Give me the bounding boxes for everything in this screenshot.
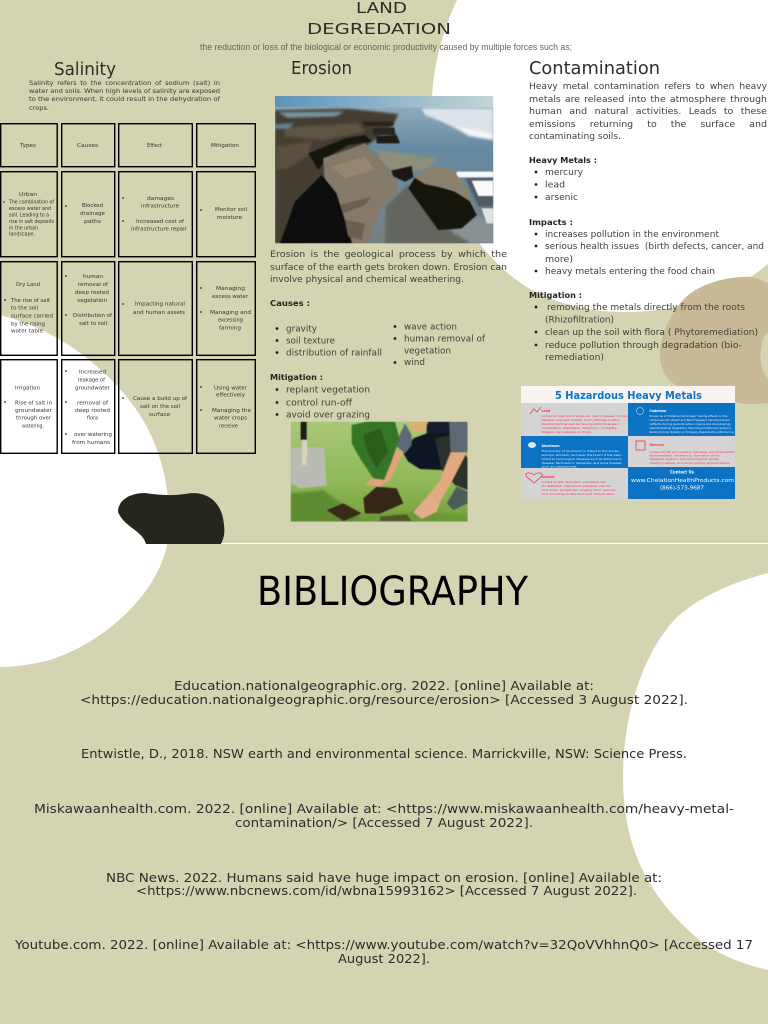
list: causes column 2	[394, 322, 486, 368]
text block: contamination definition: contaminating soils.	[529, 132, 621, 142]
table header row: Causes	[77, 143, 98, 149]
panel: bibliography	[14, 569, 753, 966]
card: lead: constipation, depression, distraction, irritability,	[542, 426, 618, 430]
table header row: Types	[19, 143, 36, 149]
table row: urban: Monitor soil	[215, 207, 247, 213]
card: aluminum: Aluminum	[542, 444, 560, 448]
table row: urban: Increased cost of	[136, 219, 184, 225]
shape: black blob	[118, 493, 224, 544]
reference 3: Miskawaanhealth.com. 2022. [online] Available at: <https://www.miskawaanhealth.com/heavy-metal-	[34, 801, 734, 816]
table row: irrigation: from humans	[72, 440, 110, 446]
list: contamination mitigation	[535, 303, 758, 363]
table row: irrigation: Rise of salt in	[15, 400, 52, 406]
table row: urban: Blocked	[82, 203, 103, 209]
table row: dry land: excessing	[218, 318, 243, 324]
text block: salinity intro	[29, 79, 221, 112]
list: causes column 1: gravity	[286, 324, 317, 334]
list: erosion mitigation: replant vegetation	[286, 386, 370, 396]
card: aluminum: kidneys, stomach, and even the brain! It has been	[542, 453, 622, 457]
table row: dry land: water table	[11, 329, 43, 335]
list: causes column 2: wave action	[404, 322, 457, 332]
text block: contamination definition: human and natural activities. Leads to these	[529, 107, 767, 117]
list: causes column 2: human removal of	[404, 334, 486, 344]
card: cadmium: Cadmium	[650, 409, 667, 413]
card: cadmium	[636, 408, 734, 434]
reference 1: <https://education.nationalgeographic.org/resource/erosion> [Accessed 3 August 2022].	[80, 692, 688, 707]
card: contact: www.ChelationHealthProducts.com	[631, 478, 734, 484]
card: arsenic: and vomiting to diarrhea and dehydration.	[542, 492, 616, 496]
photo: eroded coastline	[275, 96, 493, 243]
table row: dry land: Managing	[216, 286, 245, 292]
table row: irrigation: flora	[87, 416, 98, 422]
table row: dry land: Impacting natural	[135, 302, 185, 308]
subheading: causes: Causes :	[270, 298, 310, 308]
table row: irrigation: surface	[149, 412, 170, 418]
table row: urban: soil. Leading to a	[9, 212, 49, 218]
card: lead: fatigue, nervousness, & more.	[542, 430, 592, 434]
table row: irrigation: Using water	[214, 386, 248, 392]
card: mercury: digestive system, and neurological issues,	[650, 457, 720, 461]
table row: dry land: removal of	[78, 282, 108, 288]
list: contamination mitigation: (Rhizofiltration)	[545, 316, 614, 326]
text block: salinity intro: crops.	[29, 104, 49, 112]
shape: left white blob	[0, 315, 169, 667]
heading: salinity: Salinity	[54, 60, 116, 80]
table row: urban: rise in salt deposits	[9, 219, 54, 225]
card: arsenic: for diabetes, high blood pressure, cancer,	[542, 484, 612, 488]
list: heavy metals: arsenic	[545, 193, 578, 203]
text block: contamination definition: emissions returning to the surface and	[529, 120, 767, 130]
text block: erosion definition: Erosion is the geological process by which the	[270, 249, 507, 259]
card: mercury: Linked to fat and system damage, developmental	[650, 450, 735, 454]
table row: urban: infrastructure repair	[131, 226, 188, 232]
table row: dry land: Dry Land	[16, 282, 40, 288]
table row: irrigation: effectively	[216, 393, 245, 399]
table row: dry land: and human assets	[133, 310, 185, 316]
table row: urban: infrastructure	[141, 204, 179, 210]
card: cadmium: Known as a 'Probable Carcinogen' having effects on the	[650, 414, 728, 418]
infographic title: 5 Hazardous Heavy Metals	[555, 389, 702, 402]
card: contact: Contact Us	[670, 470, 695, 474]
subtitle: the reduction or loss of the biological or economic productivity caused by multiple forces such as;	[200, 42, 572, 53]
shape: bottom right white blob	[623, 573, 768, 970]
card: arsenic: Linked to skin disorders, increased risk	[542, 480, 606, 484]
shape: tan blob	[660, 277, 768, 404]
list: erosion mitigation: avoid over grazing	[286, 410, 370, 420]
table row: urban	[3, 192, 247, 238]
heading: bibliography: BIBLIOGRAPHY	[257, 569, 529, 615]
table row: irrigation: watering.	[22, 424, 44, 430]
table row: dry land: human	[83, 274, 103, 280]
heading: contamination: Contamination	[529, 59, 660, 79]
panel: contamination	[521, 59, 767, 499]
table row: urban: moisture	[217, 215, 242, 221]
table row: urban: drainage	[80, 211, 106, 217]
table row: dry land: The rise of salt	[10, 298, 50, 304]
list: causes column 1: soil texture	[286, 336, 335, 346]
table row: dry land: surface carried	[11, 314, 53, 320]
card: contact: (866)-573-9687	[660, 486, 704, 492]
text block: contamination definition: metals are released into the atmosphere through	[529, 95, 767, 105]
title	[307, 0, 451, 38]
table row: irrigation: water crops	[214, 416, 247, 422]
photo: planting a shrub	[291, 422, 468, 522]
table row: dry land: by the rising	[11, 322, 45, 328]
subheading: erosion mitigation: Mitigation :	[270, 372, 323, 382]
reference 5: August 2022].	[338, 951, 430, 966]
table row: urban: excess water and	[9, 206, 51, 212]
table row: irrigation: over watering	[74, 432, 112, 438]
card: mercury	[636, 441, 735, 465]
reference 3: contamination/> [Accessed 7 August 2022].	[235, 815, 533, 830]
page separator	[221, 543, 768, 544]
table: salinity	[1, 124, 255, 453]
reference 1	[80, 678, 688, 707]
heading: erosion: Erosion	[291, 59, 352, 79]
table row: irrigation: Increased	[79, 370, 106, 376]
card: aluminum	[528, 442, 622, 468]
table row: dry land: Distribution of	[73, 313, 112, 319]
list: heavy metals: mercury	[545, 168, 583, 178]
card: aluminum: disease, Parkinson's, dementia, and bone disease	[542, 461, 622, 465]
card: cadmium: Gastrointestinal (Digestive), Neurological (Nervous System),	[650, 426, 732, 430]
panel: salinity	[1, 60, 255, 453]
table row: irrigation	[4, 370, 251, 446]
table row: irrigation: deep rooted	[75, 408, 110, 414]
card: lead	[530, 407, 628, 434]
card: cadmium: Cardiovascular (Heart and Blood Vessels), Developmental	[650, 418, 730, 422]
table row: dry land: salt to soil	[79, 321, 107, 327]
table row: irrigation: salt on the soil	[140, 404, 180, 410]
text block: erosion definition: involve physical and chemical weathering.	[270, 274, 464, 284]
table row: irrigation: Cause a build up of	[133, 396, 187, 402]
card: mercury: memory issues, and even kidney abnormalities	[650, 461, 730, 465]
table row: irrigation: leakage of	[78, 378, 105, 384]
table row: irrigation: receive	[219, 424, 238, 430]
table row: irrigation: groundwater	[15, 408, 53, 414]
card: aluminum: such as osteoporosis.	[542, 464, 578, 468]
list: impacts: serious health issues (birth defects, cancer, and	[545, 242, 764, 252]
text block: salinity intro: water and soils. When high levels of salinity are exposed	[29, 87, 220, 95]
reference 4	[106, 870, 662, 898]
card: arsenic: Arsenic	[542, 475, 555, 479]
list: causes column 1: distribution of rainfall	[286, 348, 382, 358]
list: erosion mitigation: control run-off	[286, 398, 353, 408]
card: arsenic: and other symptoms ranging from nausea	[542, 488, 616, 492]
table row: urban: landscape.	[9, 232, 35, 238]
subheading: impacts: Impacts :	[529, 217, 573, 227]
card: lead: disease, reduced fertility, brain damage in fetal	[542, 418, 620, 422]
list: contamination mitigation: clean up the soil with flora ( Phytoremediation)	[545, 328, 758, 338]
table row: urban: The combination of	[8, 200, 54, 206]
table row: urban: Urban	[19, 192, 37, 198]
table row: dry land: to the soil	[11, 306, 38, 312]
text block: salinity intro: to the environment, it could result in the dehydration of	[29, 95, 221, 103]
card: aluminum: linked to neurological diseases such as Alzheimer's	[542, 457, 622, 461]
text block: erosion definition	[270, 249, 507, 284]
reference 5: Youtube.com. 2022. [online] Available at: <https://www.youtube.com/watch?v=32QoVVhhnQ0> [Accessed 17	[14, 937, 753, 952]
card: lead: Lead	[542, 409, 551, 413]
card: mercury: Mercury	[650, 443, 665, 447]
table row: irrigation: removal of	[77, 400, 108, 406]
list: causes column 2: wind	[404, 358, 425, 368]
shape: top right white blob	[432, 0, 768, 312]
card: cadmium: (effects during periods when organs are developing),	[650, 422, 732, 426]
list: contamination mitigation: remediation)	[545, 353, 604, 363]
table row: dry land: farming	[219, 326, 241, 332]
subheading: heavy metals: Heavy Metals :	[529, 155, 597, 165]
table header row	[19, 143, 239, 149]
list: causes column 1	[276, 324, 382, 358]
list: causes column 2: vegetation	[404, 346, 451, 356]
card: lead: development as well as causing abdominal pain,	[542, 422, 620, 426]
table row: dry land: deep rooted	[75, 290, 109, 296]
card: aluminum: The toxicity of aluminum is linked to the bones,	[540, 449, 620, 453]
list: heavy metals	[535, 168, 583, 203]
list: contamination mitigation: removing the metals directly from the roots	[547, 303, 746, 313]
table row: urban: paths	[84, 219, 101, 225]
text block: contamination definition	[529, 82, 767, 142]
table header row: Effect	[147, 143, 162, 149]
subheading: contamination mitigation: Mitigation :	[529, 290, 582, 300]
reference 3	[34, 801, 734, 830]
reference 2: Entwistle, D., 2018. NSW earth and environmental science. Marrickville, NSW: Science Press.	[81, 746, 687, 761]
table row: irrigation: Managing the	[212, 408, 251, 414]
text block: erosion definition: surface of the earth gets broken down. Erosion can	[270, 262, 507, 272]
card: lead: Linked to high blood pressure, heart disease, kidney	[542, 414, 628, 418]
list: impacts: more)	[545, 255, 573, 265]
reference 5	[14, 937, 753, 966]
card: arsenic	[526, 473, 616, 496]
table row: dry land: Managing and	[210, 310, 251, 316]
list: impacts	[535, 230, 764, 277]
chart: 5 hazardous heavy metals infographic	[521, 386, 735, 499]
table row: dry land: vegetation	[77, 298, 107, 304]
table row: urban: in the urban	[9, 226, 38, 232]
table row: dry land	[4, 274, 251, 335]
list: contamination mitigation: reduce pollution through degradation (bio-	[545, 341, 742, 351]
card: contact	[631, 470, 734, 492]
list: impacts: increases pollution in the environment	[545, 230, 720, 240]
list: impacts: heavy metals entering the food chain	[545, 267, 715, 277]
reference 4: <https://www.nbcnews.com/id/wbna15993162> [Accessed 7 August 2022].	[136, 883, 637, 898]
table row: irrigation: Irrigation	[15, 386, 40, 392]
table row: dry land: excess water	[212, 294, 249, 300]
list: heavy metals: lead	[545, 180, 565, 190]
title: DEGREDATION	[307, 20, 451, 38]
table row: irrigation: through over	[16, 416, 52, 422]
reference 1: Education.nationalgeographic.org. 2022. [online] Available at:	[174, 678, 594, 693]
table header row: Mitigation	[211, 143, 239, 149]
reference 4: NBC News. 2022. Humans said have huge impact on erosion. [online] Available at:	[106, 870, 662, 885]
text block: salinity intro: Salinity refers to the concentration of sodium (salt) in	[29, 79, 220, 87]
text block: contamination definition: Heavy metal contamination refers to when heavy	[529, 82, 767, 92]
panel: erosion	[270, 59, 507, 522]
list: erosion mitigation	[276, 386, 370, 420]
card: cadmium: Renal (Urinary System or Kidneys), Reproductive (Producing	[650, 430, 734, 434]
table row: irrigation: groundwater	[75, 386, 111, 392]
card: mercury: abnormalities, irritation & ulceration of the	[650, 454, 720, 458]
table row: urban: damages	[147, 196, 174, 202]
